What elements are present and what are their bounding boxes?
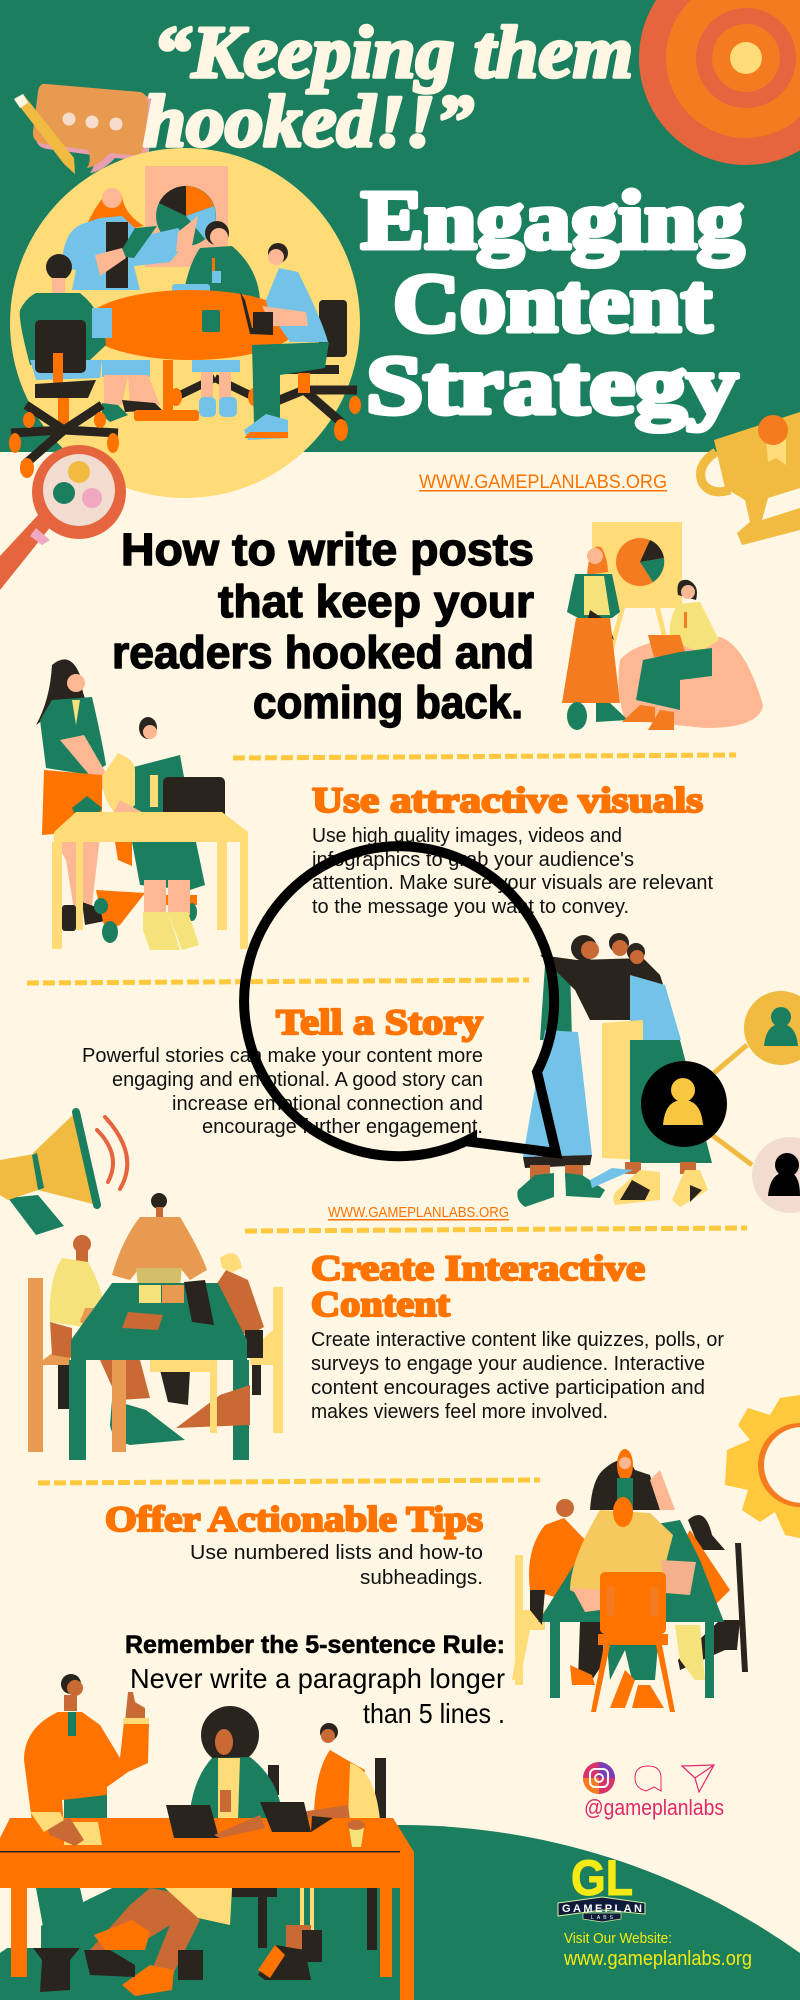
heading: Tell a Story	[276, 1002, 483, 1042]
body text: Powerful stories can make your content more	[82, 1045, 483, 1067]
link: website middle: WWW.GAMEPLANLABS.ORG	[328, 1204, 509, 1221]
body text: to the message you want to convey.	[312, 896, 629, 918]
icon: gear	[725, 1395, 800, 1538]
right chair	[170, 300, 361, 441]
heading: how to write posts: coming back.	[253, 677, 523, 728]
website footer text	[563, 1930, 752, 1970]
logo: gameplan labs: LABS	[591, 1915, 614, 1921]
body text: Use high quality images, videos and	[312, 825, 622, 847]
body text: subheadings.	[360, 1567, 483, 1589]
icon: trophy	[701, 412, 800, 545]
callout: 5-sentence rule: Remember the 5-sentence Rule:	[125, 1631, 505, 1659]
board pie chart	[616, 538, 664, 586]
centre woman chair base	[178, 378, 252, 396]
desk with laptops	[0, 1802, 414, 2000]
title: engaging content strategy: Engaging	[361, 174, 744, 267]
website footer text: Visit Our Website:	[564, 1930, 672, 1947]
illustration: three people at orange desk	[0, 1674, 414, 2000]
seated woman with afro	[189, 1706, 283, 1820]
speech bubble outline	[244, 846, 556, 1156]
body text	[82, 1045, 483, 1138]
body text	[311, 1329, 724, 1423]
seated man in orange vest	[280, 1723, 386, 1835]
illustration: meeting around orange table	[9, 148, 361, 498]
body text	[312, 825, 713, 918]
icon: chat bubble and pencil	[14, 84, 153, 174]
handle: @gameplanlabs	[584, 1795, 724, 1820]
centre seated woman	[172, 221, 260, 417]
logo: gameplan labs: GL	[571, 1850, 633, 1906]
illustration: two women at computer desk	[36, 659, 248, 950]
body text: attention. Make sure your visuals are relevant	[312, 872, 713, 894]
section: tell a story	[82, 1002, 483, 1138]
callout: 5-sentence rule	[125, 1631, 505, 1729]
section: create interactive content	[311, 1248, 724, 1423]
illustration: team around green table	[28, 1193, 283, 1460]
body text: Create interactive content like quizzes, polls, or	[311, 1329, 724, 1351]
heading: how to write posts: readers hooked and	[112, 627, 534, 678]
round table	[84, 290, 298, 421]
icon: target rings	[639, 0, 800, 165]
heading: how to write posts: How to write posts	[121, 524, 534, 575]
heading: Use attractive visuals	[312, 780, 703, 820]
heading	[311, 1248, 645, 1324]
website footer text: www.gameplanlabs.org	[563, 1948, 752, 1970]
body text: infographics to grab your audience's	[312, 849, 634, 871]
illustration: group of three people	[517, 933, 727, 1207]
standing man pointing	[24, 1674, 149, 1825]
heading: Create Interactive	[311, 1248, 645, 1288]
link: website top: WWW.GAMEPLANLABS.ORG	[419, 472, 667, 493]
illustration: team around table with orange chair	[512, 1449, 748, 1712]
callout: 5-sentence rule: than 5 lines .	[363, 1698, 505, 1729]
body text: makes viewers feel more involved.	[311, 1401, 608, 1423]
section: offer actionable tips	[105, 1499, 483, 1589]
body text: engaging and emotional. A good story can	[112, 1069, 483, 1091]
body text: Use numbered lists and how-to	[190, 1542, 483, 1564]
header panel	[0, 0, 800, 452]
right man with laptop	[240, 243, 329, 440]
heading: how to write posts: that keep your	[218, 576, 534, 627]
body text: content encourages active participation and	[311, 1377, 705, 1399]
title: keeping them hooked	[143, 12, 633, 163]
title: engaging content strategy: Strategy	[366, 339, 738, 432]
callout: 5-sentence rule: Never write a paragraph longer	[130, 1663, 505, 1694]
title: engaging content strategy	[361, 174, 744, 432]
icon: instagram	[583, 1762, 615, 1794]
icon: magnifier	[0, 445, 126, 590]
standing woman	[62, 188, 198, 422]
body text: encourage further engagement.	[202, 1116, 483, 1138]
left man with chair	[9, 254, 119, 478]
icon: comment	[635, 1766, 661, 1791]
logo: gameplan labs	[558, 1850, 645, 1922]
title: keeping them hooked: “Keeping them	[153, 12, 633, 94]
icon: megaphone	[0, 1112, 127, 1235]
logo: gameplan labs: GAMEPLAN	[562, 1903, 642, 1915]
social icons	[583, 1762, 724, 1820]
body text	[190, 1542, 483, 1589]
body text: surveys to engage your audience. Interactive	[311, 1353, 705, 1375]
title: keeping them hooked: hooked!!”	[143, 81, 474, 163]
icon: black person circle	[641, 1061, 727, 1147]
bottom green curve panel	[0, 1825, 800, 2000]
section: use attractive visuals	[312, 780, 713, 918]
body text: increase emotional connection and	[172, 1093, 483, 1115]
heading: Content	[311, 1284, 450, 1324]
pie chart on board	[156, 186, 216, 246]
heading: Offer Actionable Tips	[105, 1499, 483, 1539]
icon: paper plane	[682, 1765, 714, 1792]
illustration: presenter and woman on beanbag	[562, 522, 763, 730]
heading: how to write posts	[112, 524, 534, 728]
icon: network connector circles	[711, 991, 800, 1213]
people under the desk	[0, 1888, 377, 1996]
title: engaging content strategy: Content	[393, 257, 712, 350]
